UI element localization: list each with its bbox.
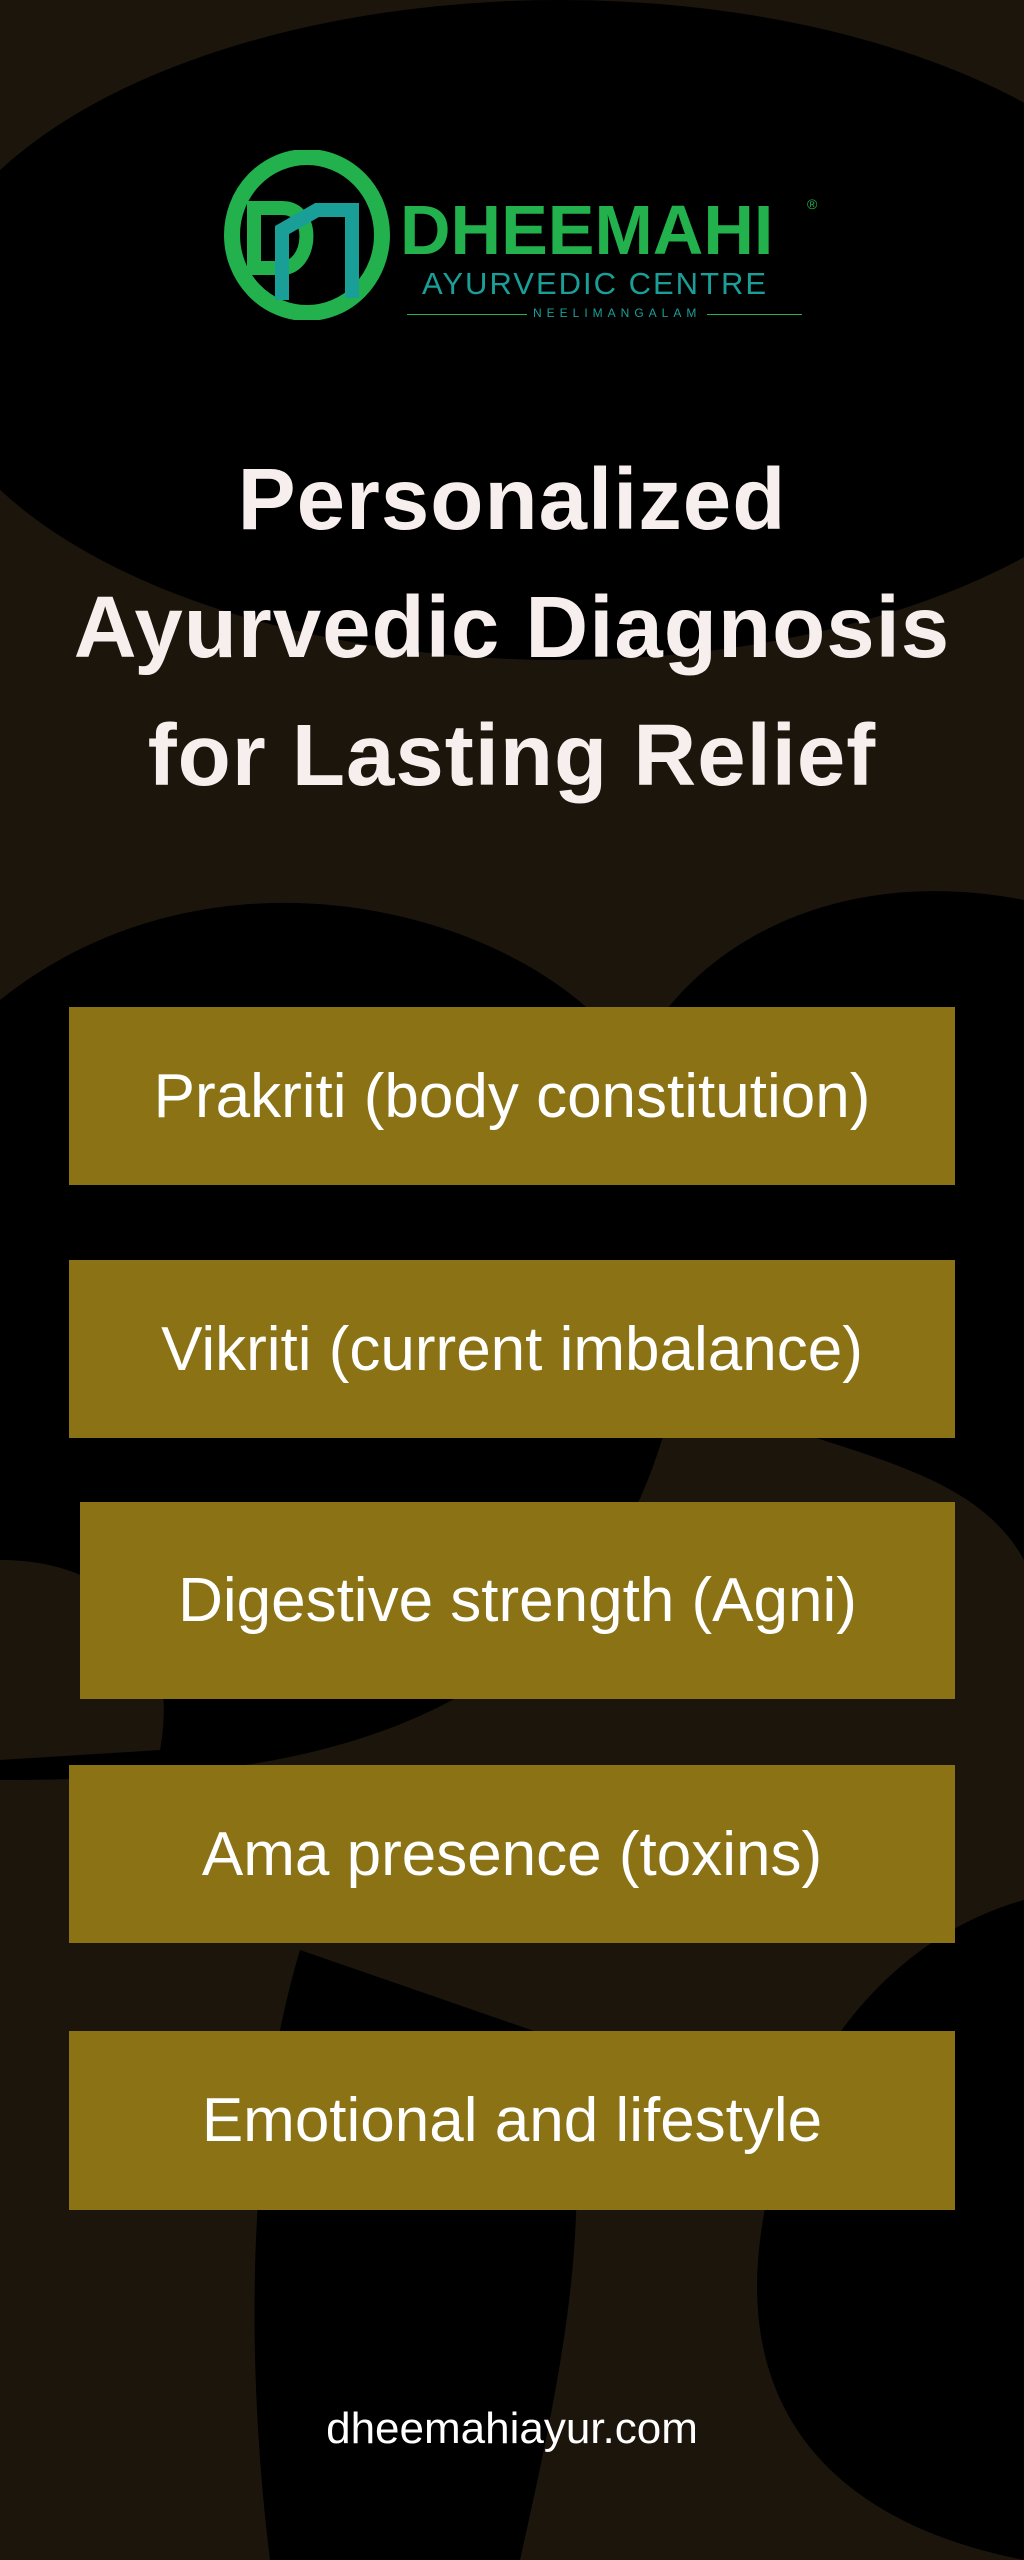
icon: DM monogram [224,150,390,320]
box: Emotional and lifestyle [69,2031,955,2210]
box: Ama presence [69,1765,955,1943]
box: Emotional and lifestyle: Emotional and lifestyle [202,2086,822,2155]
logo [224,150,818,320]
title [74,451,950,804]
box: Ama presence: Ama presence (toxins) [202,1820,822,1888]
footer url: dheemahiayur.com [326,2404,698,2453]
box: Digestive strength [80,1502,955,1699]
title: Personalized [238,451,786,548]
box: Prakriti: Prakriti (body constitution) [154,1062,870,1130]
box: Vikriti [69,1260,955,1438]
box: Prakriti [69,1007,955,1185]
logo: AYURVEDIC CENTRE [422,266,768,301]
box: Digestive strength: Digestive strength (Agni) [178,1566,857,1635]
box: Vikriti: Vikriti (current imbalance) [161,1314,863,1384]
title: Ayurvedic Diagnosis [74,579,950,676]
logo: NEELIMANGALAM [533,306,701,320]
logo: ® [807,196,817,212]
logo text: DHEEMAHI [400,191,773,269]
title: for Lasting Relief [148,707,876,804]
